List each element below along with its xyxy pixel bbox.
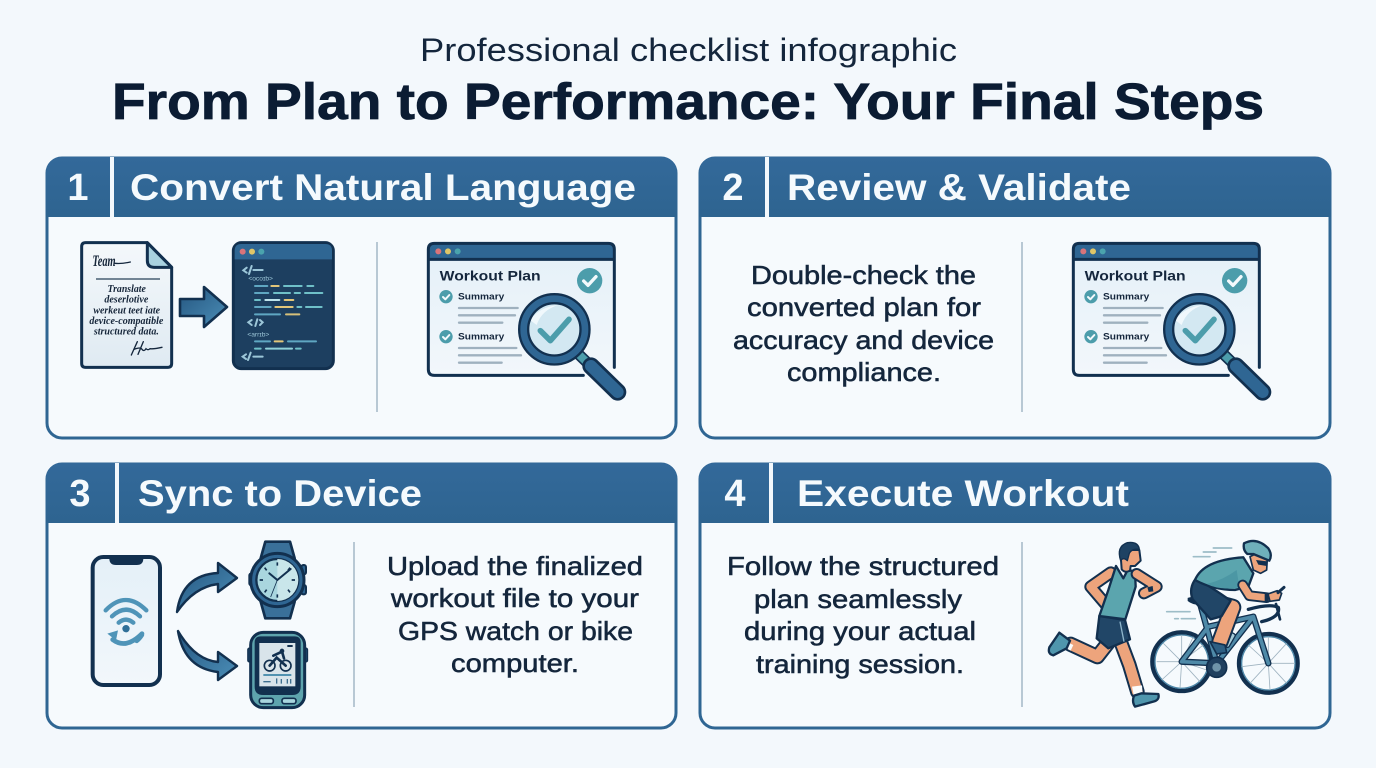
icon: phone with wireless sync bbox=[93, 557, 160, 685]
divider bbox=[1021, 242, 1023, 412]
step 2 text: accuracy and device bbox=[733, 325, 994, 355]
arrow: phone to bike computer bbox=[178, 631, 237, 680]
step 1 number: 1 bbox=[67, 167, 89, 209]
step 4 text: Follow the structured bbox=[727, 551, 999, 581]
icon: document with natural language text: werkeut teet iate bbox=[93, 305, 161, 316]
subtitle: Professional checklist infographic bbox=[420, 32, 957, 68]
step 2 text: converted plan for bbox=[747, 292, 981, 322]
icon: bike computer bbox=[248, 632, 307, 708]
step 1 header bar bbox=[46, 157, 677, 217]
step 1 heading: Convert Natural Language bbox=[130, 167, 636, 208]
step 3 text bbox=[387, 551, 643, 678]
panel: step 4 execute workout bbox=[699, 463, 1331, 728]
icon: workout plan under magnifier bbox=[428, 243, 618, 392]
step 4 text: plan seamlessly bbox=[754, 584, 962, 614]
step 3 header bar bbox=[46, 463, 677, 523]
step 4 text bbox=[727, 551, 999, 679]
step 4 header divider bbox=[769, 463, 773, 523]
step 4 number: 4 bbox=[724, 473, 746, 515]
icon: GPS watch bbox=[249, 542, 306, 618]
step 3 text: Upload the finalized bbox=[387, 551, 643, 581]
panel: step 3 sync to device bbox=[46, 463, 677, 728]
icon: code editor window: <arrɪb> bbox=[247, 332, 269, 339]
icon: code editor window: <ocoɪb> bbox=[248, 275, 273, 282]
icon: document with natural language text: deserlotive bbox=[104, 295, 149, 306]
step 3 text: workout file to your bbox=[390, 583, 639, 613]
icon: document with natural language text: Translate bbox=[107, 284, 146, 295]
icon: document with natural language text: Team bbox=[92, 253, 116, 270]
step 4 header bar bbox=[699, 463, 1331, 523]
step 3 header divider bbox=[115, 463, 119, 523]
icon: workout plan under magnifier: Summary bbox=[458, 332, 504, 342]
icon: document with natural language text: device-compatible bbox=[89, 316, 164, 327]
divider bbox=[353, 542, 355, 707]
step 3 text: GPS watch or bike bbox=[398, 616, 633, 646]
arrow: document to code bbox=[180, 287, 227, 327]
divider bbox=[1021, 542, 1023, 707]
step 2 text bbox=[733, 260, 994, 387]
icon: workout plan under magnifier: Summary bbox=[1103, 292, 1149, 302]
title: From Plan to Performance: Your Final Steps bbox=[112, 73, 1264, 130]
icon: document with natural language text bbox=[82, 243, 172, 367]
step 2 text: compliance. bbox=[787, 357, 941, 387]
arrow: phone to watch bbox=[177, 563, 237, 612]
icon: code editor window bbox=[233, 243, 333, 369]
step 2 heading: Review & Validate bbox=[787, 167, 1131, 208]
panel: step 1 convert natural language bbox=[46, 157, 677, 438]
icon: cyclist on road bike bbox=[1152, 541, 1298, 693]
icon: workout plan under magnifier: Workout Plan bbox=[1085, 268, 1186, 284]
panel: step 2 review and validate bbox=[699, 157, 1331, 438]
icon: workout plan under magnifier: Summary bbox=[458, 292, 504, 302]
step 3 number: 3 bbox=[69, 473, 91, 515]
step 3 heading: Sync to Device bbox=[138, 473, 422, 514]
step 1 header divider bbox=[110, 157, 114, 217]
step 2 number: 2 bbox=[722, 167, 744, 209]
step 2 text: Double-check the bbox=[751, 260, 976, 290]
step 3 text: computer. bbox=[451, 648, 579, 678]
icon: document with natural language text: structured data. bbox=[93, 326, 159, 337]
step 2 header bar bbox=[699, 157, 1331, 217]
icon: workout plan under magnifier: Workout Plan bbox=[440, 268, 541, 284]
step 2 header divider bbox=[765, 157, 769, 217]
icon: workout plan under magnifier bbox=[1073, 243, 1263, 392]
step 4 text: during your actual bbox=[744, 616, 976, 646]
icon: runner bbox=[1049, 542, 1159, 707]
divider bbox=[376, 242, 378, 412]
icon: workout plan under magnifier: Summary bbox=[1103, 332, 1149, 342]
step 4 text: training session. bbox=[756, 649, 964, 679]
step 4 heading: Execute Workout bbox=[797, 473, 1129, 514]
